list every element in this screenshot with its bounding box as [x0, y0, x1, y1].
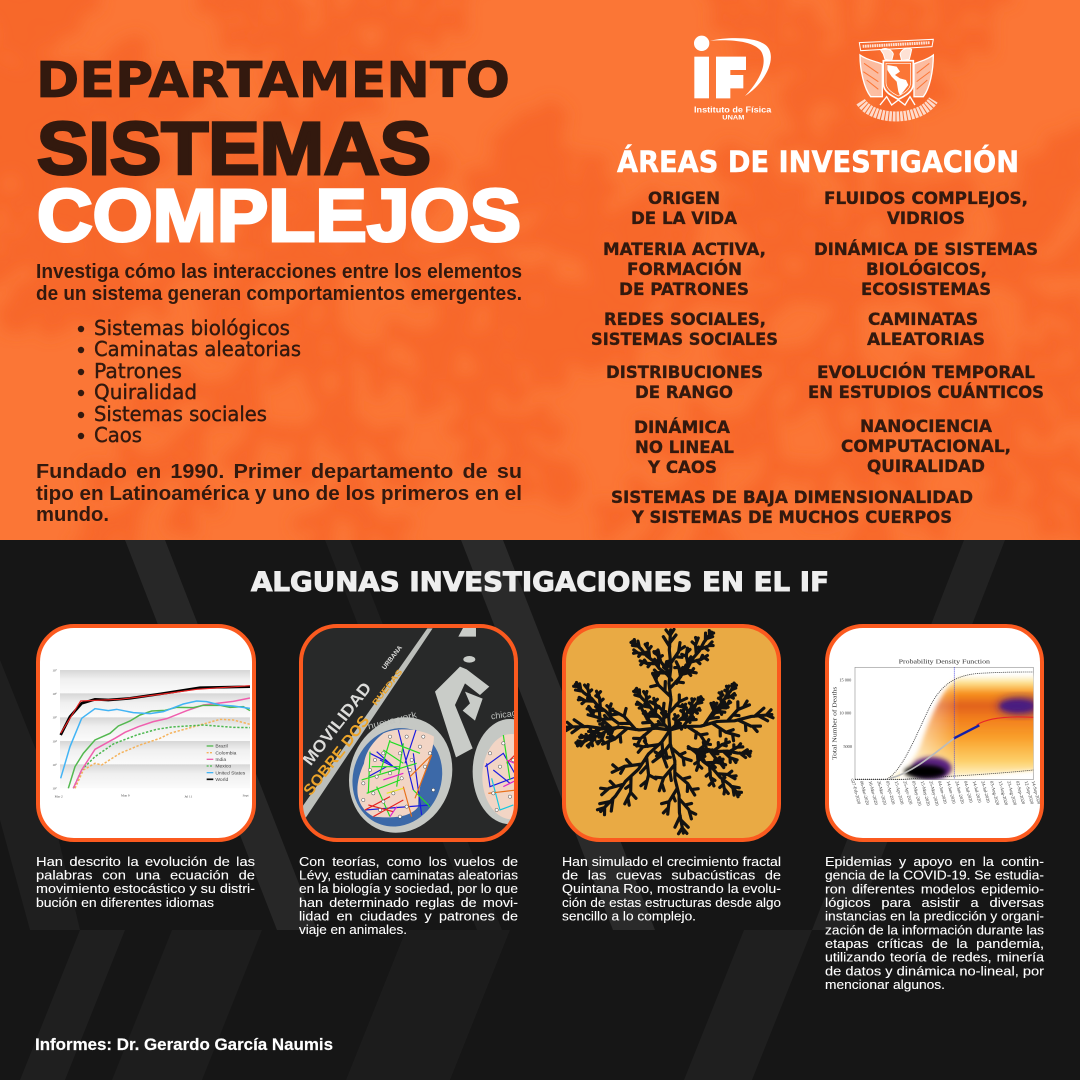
chart: probability density function: 27-Feb-2020 — [850, 781, 861, 806]
caption: mobility: en la biología y sociedad, por lo que — [299, 881, 518, 896]
image: asphalt lane markings — [299, 627, 489, 817]
chart: probability density function: 12-Sep-2020 — [1023, 781, 1034, 806]
panel: orange header background — [0, 0, 1080, 540]
caption: fractal growth: Quintana Roo, mostrando la evolu- — [562, 881, 781, 896]
line chart: word rank evolution: 10² — [52, 786, 57, 790]
line chart: word rank evolution: United States — [215, 770, 246, 776]
caption: epidemics: de datos y dinámica no-lineal, por — [825, 963, 1045, 978]
logo: Instituto de Física: Instituto de Física — [694, 104, 772, 114]
caption: fractal growth — [562, 854, 781, 923]
text block: founding: Fundado en 1990. Primer departamento de su — [36, 461, 522, 483]
text block: research areas: ALEATORIAS — [867, 330, 985, 350]
text block: founding: mundo. — [36, 504, 109, 526]
heading: Áreas de investigación: ÁREAS DE INVESTIGACIÓN — [617, 145, 1019, 179]
image: asphalt lane markings: SOBRE DOS — [300, 712, 373, 799]
bullet list: topics: Caos — [94, 423, 142, 447]
chart: probability density function: 10 000 — [839, 711, 851, 716]
line chart: word rank evolution: Colombia — [215, 750, 237, 756]
heading line: SISTEMAS: SISTEMAS — [37, 107, 431, 190]
caption: mobility: Lévy, estudian caminatas aleatorias — [299, 868, 519, 883]
line chart: word rank evolution: Brazil — [215, 744, 228, 750]
text block: research areas: Y CAOS — [647, 458, 717, 478]
text block: research areas: SISTEMAS DE BAJA DIMENSIONALIDAD — [611, 488, 973, 508]
image: fractal cave structure — [566, 625, 776, 836]
chart: probability density function: 15 000 — [839, 677, 851, 682]
chart: probability density function: 04-Jun-2020 — [936, 781, 947, 805]
chart: probability density function: 13-Aug-2020 — [997, 781, 1008, 807]
line chart: word rank evolution: 10⁴ — [52, 739, 58, 743]
text block: research areas: QUIRALIDAD — [867, 457, 985, 477]
bullet list: topics: Sistemas biológicos — [94, 316, 290, 340]
text block: research areas: DE RANGO — [635, 383, 733, 403]
image: asphalt lane markings: URBANA — [381, 644, 404, 671]
image: asphalt lane markings: MOVILIDAD — [299, 679, 375, 769]
chart: probability density function: 25-Apr-2020 — [901, 781, 913, 806]
caption: epidemics: lógicos para asistir a diversas — [825, 895, 1045, 910]
chart: probability density function: 15-Apr-2020 — [893, 781, 904, 806]
text block: research areas: DINÁMICA — [634, 416, 731, 438]
line chart: word rank evolution: 10⁷ — [52, 669, 58, 673]
chart: probability density function: 03-Aug-2020 — [988, 781, 1000, 807]
chart: probability density function: 06-Mar-2020 — [858, 781, 869, 806]
chart: probability density function: 23-Aug-2020 — [1005, 781, 1017, 807]
text block: research areas: DINÁMICA DE SISTEMAS — [814, 238, 1038, 260]
logo: Instituto de Física — [694, 36, 772, 122]
logo: Instituto de Física: UNAM — [722, 116, 744, 122]
chart: probability density function — [831, 658, 1042, 807]
map wheel: nueva york: nueva york — [367, 709, 418, 731]
text block: research areas: DE LA VIDA — [631, 209, 738, 229]
caption: fractal growth: ción de estas estructuras desde algo — [562, 895, 781, 910]
chart: probability density function: 26-Mar-2020 — [875, 781, 887, 806]
text block: research areas: VIDRIOS — [887, 209, 965, 229]
text block: introduction — [36, 261, 522, 305]
text block: research areas: MATERIA ACTIVA, — [603, 240, 766, 260]
caption: fractal growth: de las cuevas subacústicas de — [562, 868, 781, 883]
caption: word evolution: movimiento estocástico y su distri- — [36, 881, 255, 896]
chart: probability density function: 14-Jul-2020 — [971, 781, 982, 804]
text block: introduction: de un sistema generan comportamientos emergentes. — [36, 283, 522, 305]
panel: probability density chart card — [827, 626, 1042, 840]
line chart: word rank evolution: 10⁶ — [52, 692, 57, 696]
text block: founding — [36, 461, 522, 526]
caption: fractal growth: sencillo a lo complejo. — [562, 908, 696, 923]
text block: research areas: ECOSISTEMAS — [861, 280, 991, 300]
caption: fractal growth: Han simulado el crecimiento fractal — [562, 854, 781, 869]
line chart: word rank evolution: Sept — [243, 794, 249, 798]
text block: research areas: EVOLUCIÓN TEMPORAL — [817, 361, 1035, 383]
caption: epidemics: mencionar algunos. — [825, 977, 945, 992]
footer: contact information: Informes: Dr. Gerardo García Naumis — [35, 1035, 333, 1054]
text block: research areas: FORMACIÓN — [627, 258, 742, 280]
title: Departamento Sistemas Complejos — [36, 52, 521, 257]
panel: bike lane mobility image card — [299, 624, 518, 842]
bullet list: topics: Caminatas aleatorias — [94, 337, 301, 361]
text block: research areas: COMPUTACIONAL, — [841, 437, 1011, 457]
map wheel: nueva york — [349, 712, 452, 833]
chart: probability density function: Probability Density Function — [899, 658, 991, 665]
chart: probability density function: 02-Sep-2020 — [1014, 781, 1025, 806]
line chart: word rank evolution: Mexico — [215, 764, 231, 770]
text block: research areas: NO LINEAL — [635, 438, 734, 458]
map wheel: chicago: chicago — [490, 707, 522, 721]
text block: introduction: Investiga cómo las interacciones entre los elementos — [36, 261, 522, 283]
caption: mobility: Con teorías, como los vuelos de — [299, 854, 518, 869]
chart: probability density function: 16-Mar-2020 — [867, 781, 878, 806]
caption: mobility — [299, 854, 519, 937]
caption: mobility: lidad en ciudades y patrones de — [299, 908, 518, 923]
bullet list: topics: Patrones — [94, 359, 182, 383]
line chart: word rank evolution: May 9 — [121, 793, 130, 797]
line chart: word rank evolution: Jul 11 — [184, 795, 193, 799]
caption: epidemics — [825, 854, 1045, 992]
caption: epidemics: utilizando teoría de redes, minería — [825, 950, 1045, 965]
text block: research areas: REDES SOCIALES, — [604, 310, 766, 330]
caption: epidemics: etapas críticas de la pandemia, — [825, 936, 1044, 951]
chart: probability density function: 5000 — [843, 744, 852, 749]
line chart: word rank evolution: India — [215, 757, 226, 763]
heading line: COMPLEJOS: COMPLEJOS — [37, 174, 521, 257]
line chart: word rank evolution: Mar 2 — [55, 794, 63, 798]
panel: fractal growth card — [564, 625, 779, 840]
caption: word evolution — [36, 854, 256, 910]
caption: epidemics: zación de la información durante las — [825, 922, 1045, 937]
caption: epidemics: Epidemias y apoyo en la contin- — [825, 854, 1044, 869]
text block: research areas: BIOLÓGICOS, — [866, 258, 987, 280]
caption: mobility: han determinado reglas de movi- — [299, 895, 518, 910]
logo: UNAM shield — [859, 39, 933, 116]
chart: probability density function: 05-Apr-2020 — [884, 781, 895, 806]
text block: research areas: DISTRIBUCIONES — [606, 363, 763, 383]
caption: epidemics: instancias en la predicción y organi- — [825, 909, 1044, 924]
caption: word evolution: Han descrito la evolución de las — [36, 854, 256, 869]
chart: probability density function: 0 — [851, 777, 854, 782]
caption: word evolution: palabras con una ecuación de — [36, 868, 255, 883]
caption: epidemics: ron diferentes modelos epidemio- — [825, 881, 1044, 896]
panel: word evolution chart card — [38, 626, 254, 840]
text block: research areas: NANOCIENCIA — [860, 417, 993, 437]
chart: probability density function: 15-May-2020 — [919, 781, 930, 807]
line chart: word rank evolution: 10⁵ — [52, 716, 57, 720]
heading line: DEPARTAMENTO: DEPARTAMENTO — [36, 52, 510, 109]
caption: word evolution: bución en diferentes idiomas — [36, 895, 215, 910]
text block: research areas: DE PATRONES — [619, 280, 749, 300]
map wheel: chicago — [472, 711, 514, 824]
caption: epidemics: gencia de la COVID-19. Se estudia- — [825, 868, 1044, 883]
caption: mobility: viaje en animales. — [299, 922, 407, 937]
bullet list: topics — [78, 316, 301, 447]
bullet list: topics: Quiralidad — [94, 380, 197, 404]
bullet list: topics: Sistemas sociales — [94, 402, 267, 426]
line chart: word rank evolution: World — [215, 777, 228, 783]
chart: probability density function: 05-May-2020 — [910, 781, 922, 807]
chart: probability density function: 14-Sep-2020 — [1030, 781, 1041, 806]
text block: research areas: SISTEMAS SOCIALES — [591, 330, 778, 350]
chart: probability density function: 25-May-2020 — [927, 781, 939, 807]
text block: research areas: Y SISTEMAS DE MUCHOS CUERPOS — [631, 508, 952, 528]
chart: probability density function: Total Number of Deaths — [831, 686, 838, 760]
heading: Algunas investigaciones en el IF: ALGUNAS INVESTIGACIONES EN EL IF — [251, 567, 829, 598]
text block: research areas: EN ESTUDIOS CUÁNTICOS — [808, 381, 1044, 403]
chart: probability density function: 24-Jul-2020 — [979, 781, 990, 804]
chart: probability density function: 14-Jun-2020 — [945, 781, 956, 805]
line chart: word rank evolution: 10³ — [52, 763, 57, 767]
text block: research areas: FLUIDOS COMPLEJOS, — [824, 189, 1028, 209]
image: asphalt lane markings: RUEDAS — [370, 667, 405, 707]
line chart: word rank evolution — [52, 669, 250, 799]
text block: research areas: CAMINATAS — [868, 310, 978, 330]
text block: research areas: ORIGEN — [648, 189, 720, 209]
text block: founding: tipo en Latinoamérica y uno de los primeros en el — [36, 483, 522, 505]
chart: probability density function: 04-Jul-2020 — [962, 781, 973, 804]
panel: dark lower background — [0, 540, 1080, 1080]
text block: research areas — [591, 189, 1044, 528]
chart: probability density function: 24-Jun-2020 — [953, 781, 964, 805]
